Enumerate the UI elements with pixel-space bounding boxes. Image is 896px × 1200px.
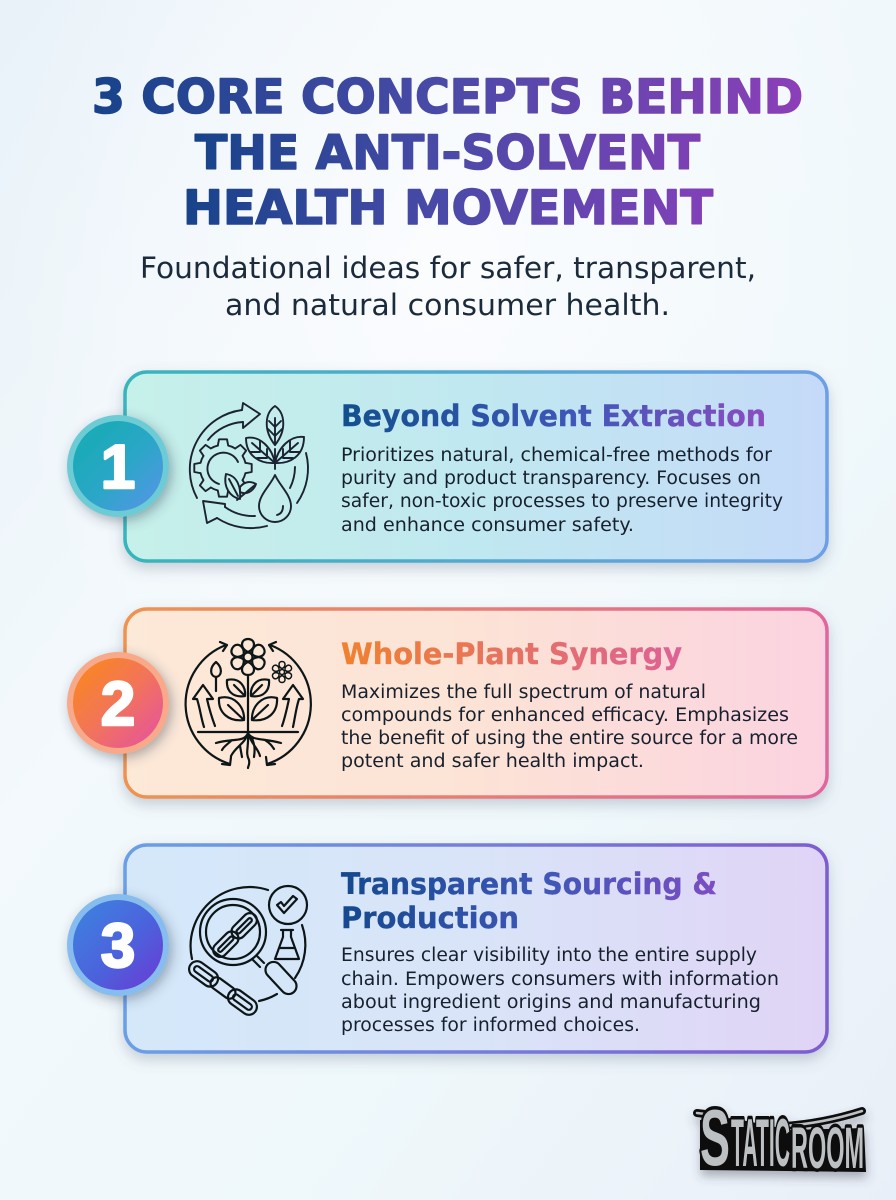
number badge 3: 3 <box>101 912 135 981</box>
body text 1: safer, non-toxic processes to preserve integrity <box>341 491 783 512</box>
heading 2: Whole-Plant Synergy <box>341 637 682 671</box>
number badge 1: 1 <box>101 433 135 502</box>
logo: Staticroom <box>697 1093 866 1182</box>
card background 3 <box>125 845 827 1052</box>
subtitle: and natural consumer health. <box>225 288 670 322</box>
body text 3: processes for informed choices. <box>341 1015 640 1036</box>
panel: Transparent Sourcing & Production <box>67 845 827 1052</box>
heading 1: Beyond Solvent Extraction <box>341 399 766 433</box>
icon: whole plant with roots <box>186 639 311 768</box>
heading 3: Transparent Sourcing & <box>341 867 717 901</box>
icon: magnifier, chain, check and flask <box>186 886 307 1018</box>
number badge 1 <box>67 415 169 517</box>
body text 1 <box>341 445 783 536</box>
title: HEALTH MOVEMENT <box>183 181 713 236</box>
body text 2: the benefit of using the entire source for a more <box>341 728 798 749</box>
body text 3 <box>341 945 779 1036</box>
body text 2: potent and safer health impact. <box>341 751 644 772</box>
body text 1: Prioritizes natural, chemical-free methods for <box>341 445 772 466</box>
number badge 2: 2 <box>101 670 135 739</box>
card background 1 <box>125 372 827 561</box>
heading 3: Production <box>341 901 519 935</box>
icon: gear, leaves and water drop cycle <box>190 403 308 528</box>
body text 1: and enhance consumer safety. <box>341 515 634 536</box>
body text 1: purity and product transparency. Focuses on <box>341 468 761 489</box>
panel: Beyond Solvent Extraction <box>67 372 827 561</box>
number badge 3 <box>67 894 169 996</box>
body text 2: Maximizes the full spectrum of natural <box>341 682 706 703</box>
logo: Staticroom: S <box>700 1093 730 1182</box>
body text 2: compounds for enhanced efficacy. Emphasizes <box>341 705 789 726</box>
body text 2 <box>341 682 798 772</box>
subtitle: Foundational ideas for safer, transparent, <box>140 251 756 285</box>
title: THE ANTI-SOLVENT <box>195 126 700 181</box>
title <box>92 70 803 236</box>
panel: Whole-Plant Synergy <box>67 609 827 797</box>
heading 3 <box>341 867 717 935</box>
body text 3: Ensures clear visibility into the entire supply <box>341 945 757 966</box>
subtitle <box>140 251 756 322</box>
number badge 2 <box>67 652 169 754</box>
card background 2 <box>125 609 827 797</box>
title: 3 CORE CONCEPTS BEHIND <box>92 70 803 125</box>
body text 3: about ingredient origins and manufacturing <box>341 992 761 1013</box>
body text 3: chain. Empowers consumers with information <box>341 969 779 990</box>
